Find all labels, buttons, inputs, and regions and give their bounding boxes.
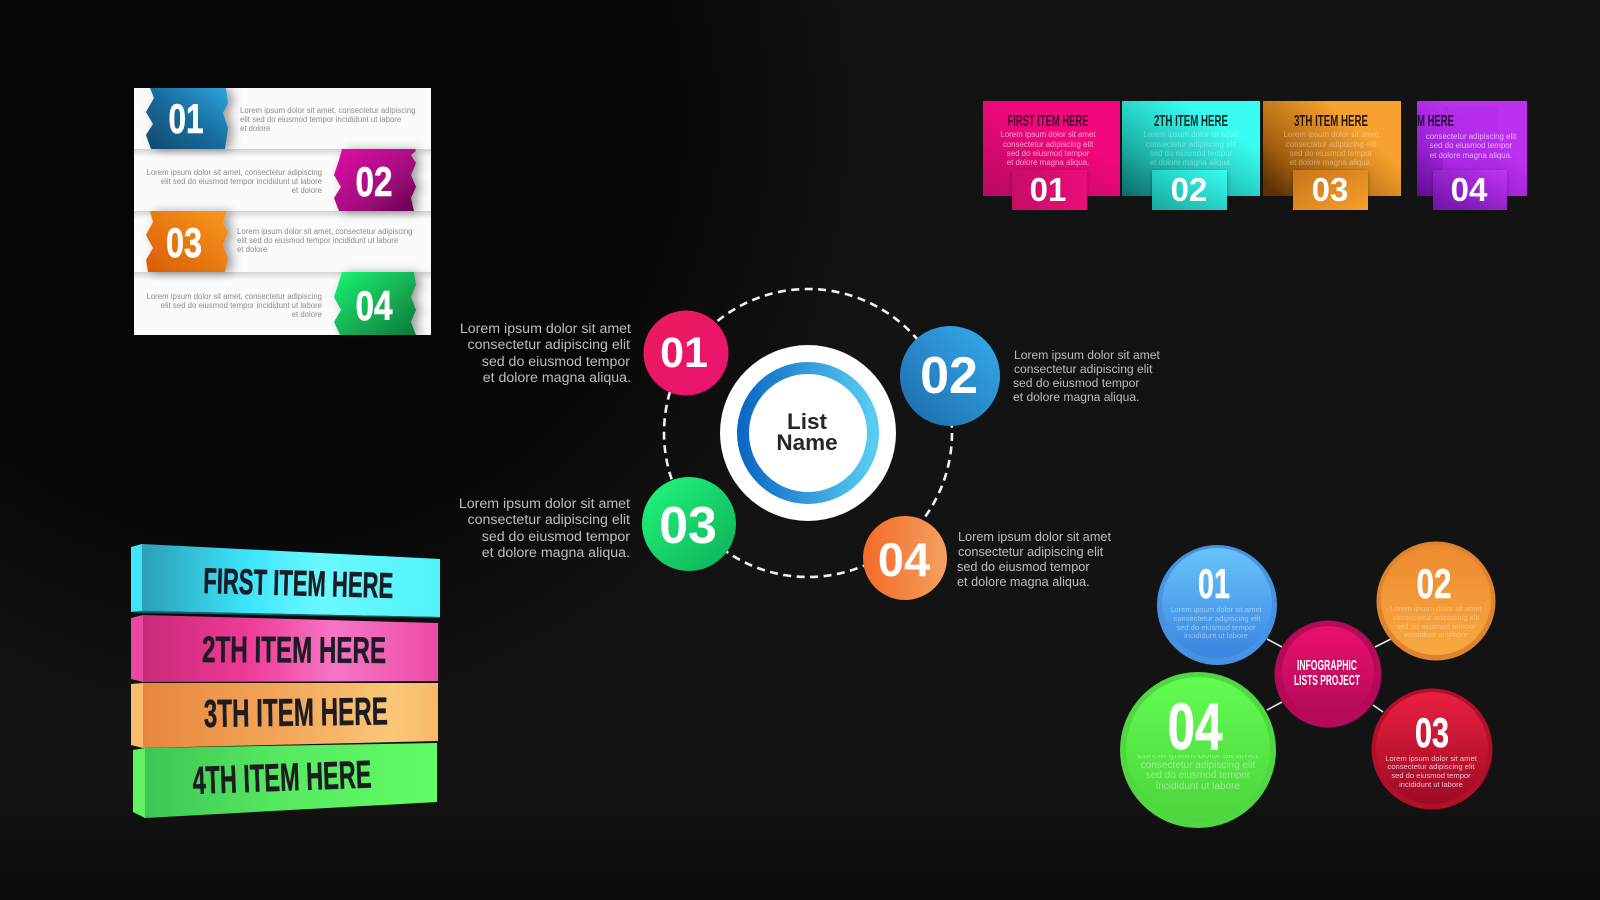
center white disc: List: [787, 409, 828, 434]
bubble 02 orange: [1376, 542, 1496, 660]
text block 02: [1013, 348, 1160, 404]
node 04: [863, 516, 947, 600]
node 02: [900, 326, 1000, 426]
panel: 3D bars bottom left: [131, 544, 440, 818]
node 01: 01: [660, 329, 708, 377]
bar 2 pink: [131, 615, 438, 682]
row 4 text: [146, 292, 322, 319]
bubble 04 green: 04: [1168, 689, 1223, 763]
row 3 text: et dolore: [237, 245, 267, 254]
bar 1 cyan: FIRST ITEM HERE: [203, 560, 394, 606]
row 3 text: [237, 227, 413, 254]
bubble 01 blue: incididunt ut labore: [1184, 631, 1248, 640]
bubble 02 orange: incididunt ut labore: [1404, 630, 1468, 639]
bubble 01 blue: [1157, 545, 1277, 665]
card 2 cyan: et dolore magna aliqua.: [1150, 158, 1232, 167]
bar 2 pink: 2TH ITEM HERE: [202, 629, 386, 671]
chart: bubble cluster bottom right: [1120, 542, 1496, 828]
bar 4 green: 4TH ITEM HERE: [192, 753, 372, 803]
bubble 01 blue: 01: [1198, 560, 1230, 607]
bubble 03 red: incididunt ut labore: [1399, 780, 1463, 789]
card 3 orange: 03: [1312, 171, 1348, 208]
card 3 orange: [1263, 101, 1401, 210]
bubble 04 green: consectetur adipiscing elit: [1141, 760, 1255, 771]
bubble 04 green: Lorem ipsum dolor sit amet: [1138, 750, 1259, 761]
row 4 tab: 04: [356, 282, 393, 329]
bubble 04 green: sed do eiusmod tempor: [1146, 770, 1251, 781]
row 2 text: elit sed do eiusmod tempor incididunt ut labore: [161, 177, 322, 186]
row 4 tab: [334, 272, 416, 335]
card 1 pink: et dolore magna aliqua.: [1007, 158, 1089, 167]
row 1 text: [240, 106, 416, 133]
row 1 text: et dolore: [240, 124, 270, 133]
text block 03: Lorem ipsum dolor sit amet: [459, 496, 630, 512]
card 2 cyan: sed do eiusmod tempor: [1150, 149, 1233, 158]
text block 02: consectetur adipiscing elit: [1014, 362, 1153, 376]
card 1 pink: FIRST ITEM HERE: [1008, 113, 1089, 130]
bubble 03 red: [1372, 688, 1492, 810]
bubble 02 orange: consectetur adipiscing elit: [1393, 613, 1480, 622]
center white disc: Name: [776, 430, 838, 455]
text block 04: sed do eiusmod tempor: [957, 560, 1090, 574]
bar 3 orange: 3TH ITEM HERE: [204, 690, 388, 736]
card 4 purple: M HERE: [1417, 113, 1454, 130]
text block 01: sed do eiusmod tempor: [482, 354, 630, 370]
text block 03: sed do eiusmod tempor: [482, 529, 630, 545]
row 3 text: elit sed do eiusmod tempor incididunt ut labore: [237, 236, 398, 245]
center bubble: LISTS PROJECT: [1294, 672, 1360, 689]
bubble 01 blue: Lorem ipsum dolor sit amet: [1170, 605, 1263, 614]
bubble 03 red: 03: [1415, 709, 1449, 756]
text block 02: et dolore magna aliqua.: [1013, 390, 1139, 404]
card 2 cyan: [1122, 101, 1260, 210]
card 4 purple: [1417, 101, 1527, 210]
card 1 pink: Lorem ipsum dolor sit amet: [1000, 130, 1096, 139]
row 3 tab: [146, 211, 228, 272]
node 04: 04: [878, 533, 930, 586]
text block 02: Lorem ipsum dolor sit amet: [1014, 348, 1160, 362]
card 3 orange: et dolore magna aliqua.: [1290, 158, 1372, 167]
card 4 purple: 04: [1451, 171, 1488, 208]
card 2 cyan: Lorem ipsum dolor sit amet: [1143, 130, 1239, 139]
card 3 orange: Lorem ipsum dolor sit amet: [1283, 130, 1379, 139]
bubble 02 orange: Lorem ipsum dolor sit amet: [1390, 604, 1483, 613]
bubble 03 red: sed do eiusmod tempor: [1391, 771, 1471, 780]
bubble 03 red: consectetur adipiscing elit: [1388, 762, 1475, 771]
node 03: [642, 477, 736, 571]
text block 01: Lorem ipsum dolor sit amet: [460, 321, 631, 337]
card 4 purple: sed do eiusmod tempor: [1430, 141, 1513, 150]
row 1 text: Lorem ipsum dolor sit amet, consectetur adipiscing: [240, 106, 416, 115]
text block 01: et dolore magna aliqua.: [483, 370, 631, 386]
row 2 text: [146, 168, 322, 195]
bubble 04 green: [1120, 672, 1276, 828]
text block 04: Lorem ipsum dolor sit amet: [958, 530, 1111, 544]
card 4 purple: consectetur adipiscing elit: [1426, 132, 1517, 141]
row 1 tab: [146, 88, 228, 149]
row 4 text: Lorem ipsum dolor sit amet, consectetur adipiscing: [146, 292, 322, 301]
center bubble: [1274, 620, 1382, 728]
panel: square cards top right: [983, 101, 1527, 210]
card 2 cyan: consectetur adipiscing elit: [1146, 140, 1237, 149]
card 2 cyan: 2TH ITEM HERE: [1154, 113, 1228, 130]
card 3 orange: 3TH ITEM HERE: [1294, 113, 1368, 130]
bar 4 green: [133, 743, 437, 818]
card 3 orange: consectetur adipiscing elit: [1286, 140, 1377, 149]
row 2 text: et dolore: [292, 186, 322, 195]
bubble 02 orange: sed do eiusmod tempor: [1396, 622, 1476, 631]
center white disc: [720, 345, 896, 521]
row 4 text: elit sed do eiusmod tempor incididunt ut labore: [161, 301, 322, 310]
row 1 tab: 01: [168, 95, 204, 142]
row 1 text: elit sed do eiusmod tempor incididunt ut labore: [240, 115, 401, 124]
bubble 01 blue: consectetur adipiscing elit: [1174, 614, 1261, 623]
card 1 pink: sed do eiusmod tempor: [1007, 149, 1090, 158]
panel: ribbon list top left: [134, 88, 431, 335]
node 02: 02: [920, 347, 978, 405]
text block 03: consectetur adipiscing elit: [468, 512, 630, 528]
card 4 purple: et dolore magna aliqua.: [1430, 151, 1512, 160]
text block 03: et dolore magna aliqua.: [482, 545, 630, 561]
card 3 orange: sed do eiusmod tempor: [1290, 149, 1373, 158]
chart: central list name ring: [642, 289, 1000, 600]
row 2 tab: 02: [356, 158, 392, 205]
node 01: [644, 310, 728, 396]
bubble 03 red: Lorem ipsum dolor sit amet: [1385, 754, 1478, 763]
text block 01: consectetur adipiscing elit: [468, 337, 630, 353]
bar 3 orange: [131, 683, 438, 748]
row 4 text: et dolore: [292, 310, 322, 319]
node 03: 03: [659, 497, 717, 555]
row 2 tab: [334, 149, 416, 211]
bubble 04 green: incididunt ut labore: [1156, 781, 1240, 792]
card 1 pink: 01: [1030, 171, 1066, 208]
text block 04: et dolore magna aliqua.: [957, 575, 1090, 589]
row 2 text: Lorem ipsum dolor sit amet, consectetur adipiscing: [146, 168, 322, 177]
card 1 pink: consectetur adipiscing elit: [1003, 140, 1094, 149]
text block 03: [459, 496, 630, 561]
bar 1 cyan: [131, 544, 440, 618]
row 3 text: Lorem ipsum dolor sit amet, consectetur adipiscing: [237, 227, 413, 236]
row 3 tab: 03: [166, 219, 202, 266]
bubble 01 blue: sed do eiusmod tempor: [1176, 623, 1256, 632]
text block 04: consectetur adipiscing elit: [958, 545, 1104, 559]
text block 04: [957, 530, 1111, 589]
text block 01: [460, 321, 631, 386]
text block 02: sed do eiusmod tempor: [1013, 376, 1139, 390]
center bubble: INFOGRAPHIC: [1297, 657, 1357, 674]
card 1 pink: [983, 101, 1120, 210]
card 2 cyan: 02: [1171, 171, 1207, 208]
bubble 02 orange: 02: [1416, 560, 1452, 607]
